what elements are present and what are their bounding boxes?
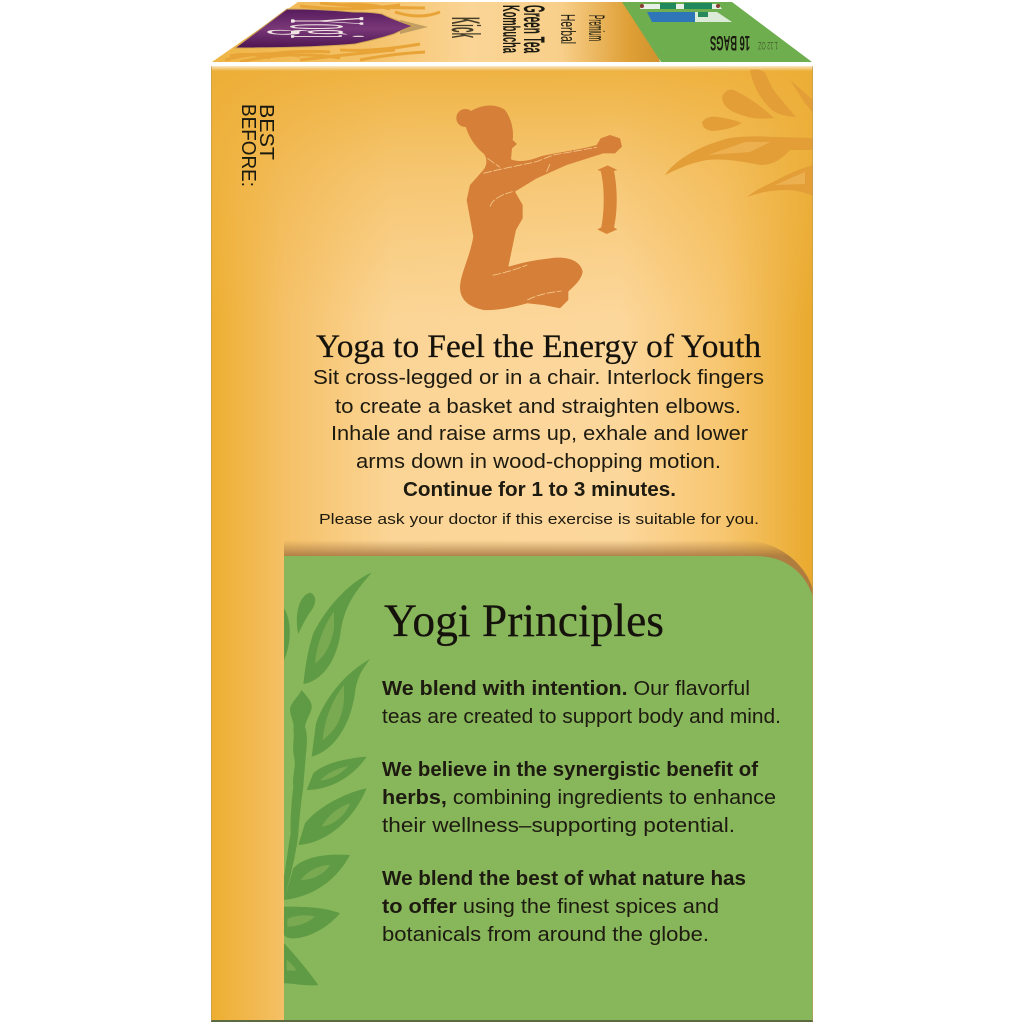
icon: double-headed motion arrow <box>597 165 617 234</box>
heading: yogi principles: Yogi Principles <box>384 595 664 647</box>
doctor disclaimer: Please ask your doctor if this exercise is suitable for you. <box>319 511 759 528</box>
tea box back panel: Green Tea <box>517 5 550 53</box>
top flap of the box: Kick <box>443 17 487 38</box>
green panel background <box>284 556 813 1021</box>
leaf highlights <box>287 612 350 971</box>
yoga instructions text: arms down in wood-chopping motion. <box>356 450 721 473</box>
principle three: We blend the best of what nature has <box>382 867 746 890</box>
yoga instructions text: Continue for 1 to 3 minutes. <box>403 478 676 501</box>
flipped tea bag count: 1.12 OZ <box>758 39 778 51</box>
panel: yogi principles <box>284 556 813 1021</box>
top flap of the box <box>212 2 812 62</box>
principle one: We blend with intention. Our flavorful <box>382 677 750 700</box>
principle one <box>382 677 781 728</box>
principle two: herbs, combining ingredients to enhance <box>382 786 776 809</box>
rotated product name <box>443 5 609 53</box>
top flap of the box: 16 BAGS <box>710 31 750 54</box>
principle three: to offer using the finest spices and <box>382 895 719 918</box>
principle two <box>382 758 776 837</box>
shadow above green panel <box>284 540 813 600</box>
best before label <box>237 104 277 187</box>
top floral pattern <box>225 3 440 62</box>
best before label: BEST <box>255 104 277 160</box>
banner shadow tip <box>400 20 428 34</box>
flipped tea bag count <box>710 31 778 54</box>
leaf highlights <box>708 142 805 185</box>
organic seals <box>640 3 732 22</box>
yoga instructions text: to create a basket and straighten elbows. <box>335 395 741 418</box>
principle two: We believe in the synergistic benefit of <box>382 758 758 781</box>
principle three: botanicals from around the globe. <box>382 923 709 946</box>
top flap of the box: Premium <box>584 15 609 41</box>
yoga instructions text: Sit cross-legged or in a chair. Interlock fingers <box>313 366 764 389</box>
icon: seated yoga figure with arms raised <box>456 105 622 310</box>
principle three <box>382 867 746 946</box>
decorative orange leaves, top right <box>665 70 813 197</box>
tea box back panel: Kombucha <box>497 5 524 53</box>
heading: yoga section: Yoga to Feel the Energy of Youth <box>316 329 761 365</box>
figure contour highlights <box>483 147 597 300</box>
best before label: BEFORE: <box>237 104 259 187</box>
purple Yogi banner <box>235 9 413 48</box>
tea box back panel <box>211 2 813 1022</box>
top green label <box>622 2 812 62</box>
yoga instructions text <box>313 366 764 501</box>
principle two: their wellness–supporting potential. <box>382 814 735 837</box>
tea box back panel: Yogi <box>267 17 389 38</box>
front panel background <box>211 66 813 1021</box>
decorative green leaves <box>284 573 372 985</box>
yoga instructions text: Inhale and raise arms up, exhale and lower <box>331 422 748 445</box>
bottom and side edges <box>211 1020 813 1022</box>
rotated product name: Herbal <box>556 14 578 44</box>
top face background <box>212 2 660 62</box>
principle one: teas are created to support body and mind. <box>382 705 781 728</box>
